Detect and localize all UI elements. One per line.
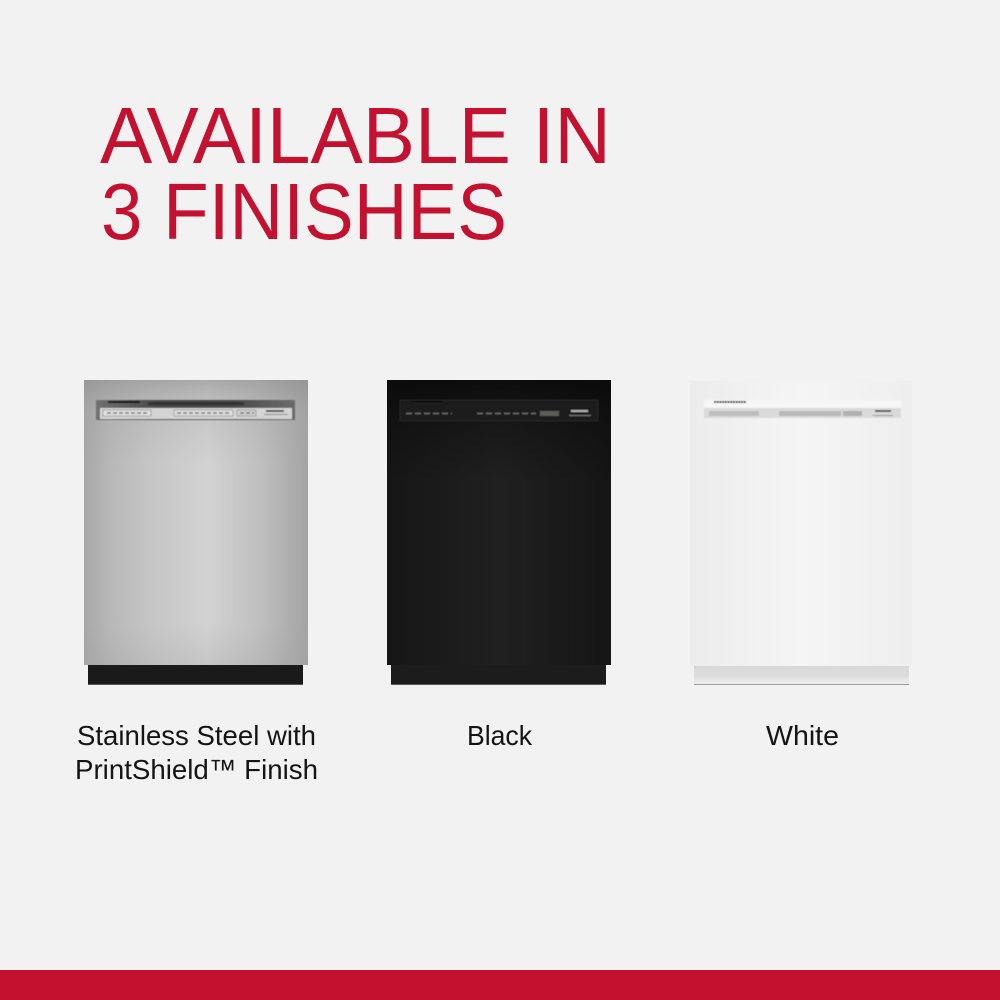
panel: black dishwasher bbox=[387, 380, 611, 685]
label: white: White bbox=[766, 720, 839, 751]
label: stainless steel: PrintShield™ Finish bbox=[75, 754, 318, 785]
panel: stainless steel dishwasher bbox=[84, 380, 308, 685]
label: black: Black bbox=[467, 720, 533, 751]
label: stainless steel: Stainless Steel with bbox=[77, 720, 316, 751]
label: stainless steel bbox=[75, 720, 318, 785]
title: AVAILABLE IN bbox=[100, 91, 611, 180]
title bbox=[100, 91, 611, 256]
footer bar bbox=[0, 970, 1000, 1000]
title: 3 FINISHES bbox=[101, 167, 507, 256]
panel: white dishwasher bbox=[690, 381, 912, 685]
